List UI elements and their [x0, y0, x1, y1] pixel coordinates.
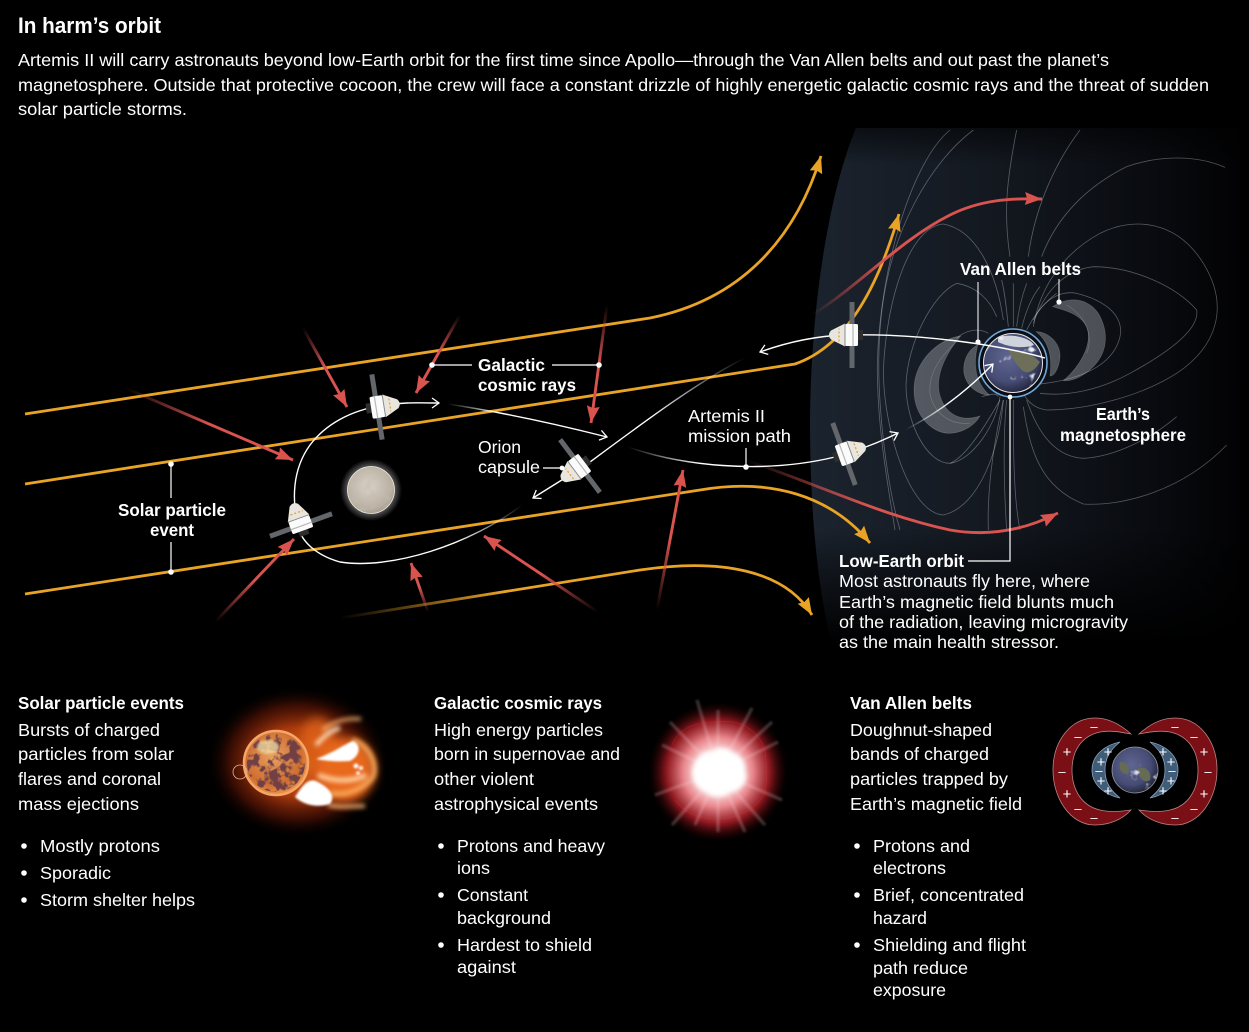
- icon: Van Allen belts diagram: –: [1058, 764, 1066, 779]
- panel: galactic cosmic rays: Protons and heavy: [457, 836, 605, 856]
- icon: Van Allen belts diagram: +: [1097, 773, 1106, 790]
- label: Artemis II mission path: Artemis II: [688, 406, 765, 426]
- Van Allen belts (magnetosphere diagram): [914, 300, 1105, 433]
- callout: low-Earth orbit: Low-Earth orbit: [839, 551, 964, 571]
- panel: Van Allen belts: hazard: [873, 908, 927, 928]
- icon: Van Allen belts diagram: –: [1168, 763, 1176, 778]
- label: Orion capsule: capsule: [478, 457, 540, 477]
- intro text: solar particle storms.: [18, 99, 187, 119]
- panel: Van Allen belts: bands of charged: [850, 744, 989, 764]
- icon: Van Allen belts diagram: –: [1190, 801, 1198, 816]
- callout: low-Earth orbit: as the main health stressor.: [839, 632, 1059, 652]
- icon: Van Allen belts diagram: [1053, 718, 1217, 825]
- icon: Van Allen belts diagram: +: [1063, 786, 1072, 803]
- intro text: magnetosphere. Outside that protective cocoon, the crew will face a constant drizzle of highly energetic galactic cosmic rays and the threat of sudden: [18, 75, 1209, 95]
- Orion capsule icons: [262, 302, 877, 547]
- panel: Van Allen belts: Shielding and flight: [873, 935, 1026, 955]
- label: galactic cosmic rays: Galactic: [478, 355, 545, 375]
- label: solar particle event: [118, 461, 226, 575]
- icon: Van Allen belts diagram: –: [1074, 729, 1082, 744]
- panel: Van Allen belts: path reduce: [873, 958, 968, 978]
- callout: low-Earth orbit: of the radiation, leaving microgravity: [839, 612, 1128, 632]
- callout: low-Earth orbit: Earth’s magnetic field blunts much: [839, 592, 1114, 612]
- icon: Van Allen belts diagram: –: [1190, 729, 1198, 744]
- icon: Van Allen belts diagram: +: [1200, 786, 1209, 803]
- panel: galactic cosmic rays: other violent: [434, 769, 534, 789]
- icon: Van Allen belts diagram: –: [1090, 719, 1098, 734]
- panel: galactic cosmic rays: Hardest to shield: [457, 935, 592, 955]
- panel: galactic cosmic rays: Constant: [457, 885, 528, 905]
- label: Earth's magnetosphere: [1060, 404, 1186, 445]
- icon: Van Allen belts diagram: +: [1097, 754, 1106, 771]
- panel: galactic cosmic rays: Galactic cosmic rays: [434, 693, 602, 713]
- icon: Van Allen belts diagram: –: [1204, 764, 1212, 779]
- icon: Van Allen belts diagram: –: [1074, 801, 1082, 816]
- panel: galactic cosmic rays: born in supernovae and: [434, 744, 620, 764]
- panel: Van Allen belts: Doughnut-shaped: [850, 720, 992, 740]
- panel: solar particle events: mass ejections: [18, 794, 139, 814]
- icon: Van Allen belts diagram: +: [1200, 744, 1209, 761]
- panel: Van Allen belts: Protons and: [873, 836, 970, 856]
- moon: [340, 459, 402, 521]
- icon: Van Allen belts diagram: +: [1104, 783, 1113, 800]
- panel: Van Allen belts: particles trapped by: [850, 769, 1008, 789]
- label: Orion capsule: [478, 437, 564, 477]
- panel: solar particle events: Sporadic: [40, 863, 111, 883]
- icon: Van Allen belts diagram: +: [1159, 744, 1168, 761]
- icon: Van Allen belts diagram: –: [1095, 763, 1103, 778]
- label: Van Allen belts: Van Allen belts: [960, 259, 1081, 279]
- icon: Van Allen belts diagram: +: [1063, 744, 1072, 761]
- callout: low-Earth orbit: Most astronauts fly here, where: [839, 571, 1090, 591]
- panel: Van Allen belts: exposure: [873, 980, 946, 1000]
- icon: Van Allen belts diagram: –: [1171, 719, 1179, 734]
- panel: solar particle events: Mostly protons: [40, 836, 160, 856]
- panel: Van Allen belts: electrons: [873, 858, 946, 878]
- icon: Van Allen belts diagram: –: [1171, 810, 1179, 825]
- icon: Van Allen belts diagram: +: [1167, 773, 1176, 790]
- label: galactic cosmic rays: cosmic rays: [478, 375, 576, 395]
- orange galactic cosmic ray paths: [25, 156, 899, 618]
- intro text: [18, 50, 1209, 119]
- panel: Van Allen belts: [850, 693, 1026, 1000]
- label: solar particle event: event: [150, 520, 194, 540]
- icon: Van Allen belts diagram: –: [1090, 810, 1098, 825]
- panel: solar particle events: Bursts of charged: [18, 720, 160, 740]
- panel: galactic cosmic rays: background: [457, 908, 551, 928]
- label: Artemis II mission path: mission path: [688, 426, 791, 446]
- Earth: [979, 329, 1047, 397]
- Artemis II mission path: [294, 335, 1045, 563]
- icon: Van Allen belts diagram: +: [1167, 754, 1176, 771]
- label: Van Allen belts: [960, 259, 1081, 345]
- label: Earth's magnetosphere: magnetosphere: [1060, 425, 1186, 445]
- intro text: Artemis II will carry astronauts beyond low-Earth orbit for the first time since Apollo—through the Van Allen belts and out past the planet’s: [18, 50, 1109, 70]
- panel: galactic cosmic rays: astrophysical events: [434, 794, 598, 814]
- panel: solar particle events: [18, 693, 195, 910]
- panel: solar particle events: Storm shelter helps: [40, 890, 195, 910]
- panel: galactic cosmic rays: [434, 693, 620, 977]
- panel: Van Allen belts: Van Allen belts: [850, 693, 972, 713]
- label: Artemis II mission path: [688, 406, 791, 470]
- label: solar particle event: Solar particle: [118, 500, 226, 520]
- label: galactic cosmic rays: [429, 355, 602, 395]
- red solar particle arrows: [125, 199, 1058, 622]
- callout: low-Earth orbit: [839, 395, 1128, 652]
- panel: solar particle events: particles from solar: [18, 744, 174, 764]
- icon: cosmic ray starburst: [648, 700, 788, 842]
- panel: Van Allen belts: Brief, concentrated: [873, 885, 1024, 905]
- panel: magnetosphere background: [800, 128, 1245, 665]
- icon: Van Allen belts diagram: +: [1159, 783, 1168, 800]
- title: In harm’s orbit: [18, 13, 162, 38]
- icon: solar eruption: [206, 686, 390, 838]
- label: Orion capsule: Orion: [478, 437, 521, 457]
- icon: Van Allen belts diagram: +: [1104, 744, 1113, 761]
- panel: galactic cosmic rays: against: [457, 957, 516, 977]
- label: Earth's magnetosphere: Earth’s: [1096, 404, 1150, 424]
- panel: galactic cosmic rays: ions: [457, 858, 490, 878]
- panel: Van Allen belts: Earth’s magnetic field: [850, 794, 1022, 814]
- magnetic field lines: [877, 130, 1227, 530]
- panel: galactic cosmic rays: High energy particles: [434, 720, 603, 740]
- panel: solar particle events: Solar particle events: [18, 693, 184, 713]
- panel: solar particle events: flares and coronal: [18, 769, 161, 789]
